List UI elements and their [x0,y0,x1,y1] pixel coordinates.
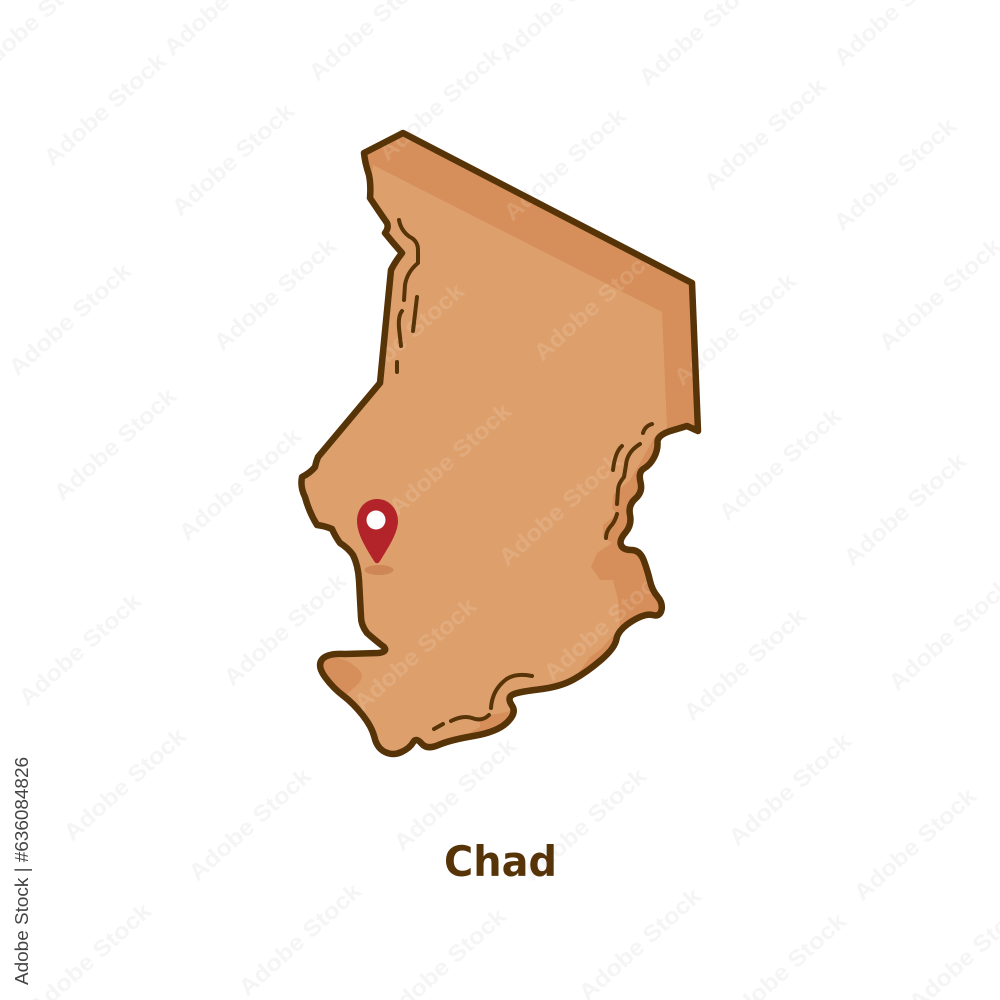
watermark over map: Adobe Stock [383,397,516,521]
watermark over map: Adobe Stock [373,42,506,166]
watermark over map: Adobe Stock [493,447,626,571]
map of Chad [298,130,702,758]
watermark pattern: Adobe Stock [723,727,856,851]
watermark over map: Adobe Stock [668,267,801,391]
watermark pattern: Adobe Stock [373,42,506,166]
watermark pattern: Adobe Stock [218,567,351,691]
watermark over map: Adobe Stock [336,277,469,401]
watermark pattern: Adobe Stock [713,402,846,526]
watermark over map: Adobe Stock [528,242,661,366]
watermark pattern: Adobe Stock [233,877,366,1000]
stock image credit: Adobe Stock | #636084826 [12,757,32,985]
map lighter face [290,165,667,770]
watermark pattern: Adobe Stock [3,257,136,381]
watermark pattern: Adobe Stock [838,447,971,571]
watermark pattern: Adobe Stock [828,112,961,236]
watermark pattern: Adobe Stock [873,232,1000,356]
watermark pattern: Adobe Stock [388,732,521,856]
watermark pattern: Adobe Stock [13,587,146,711]
title: country name: Chad [444,837,557,886]
pin body [357,499,398,563]
watermark pattern: Adobe Stock [848,782,981,906]
pin shadow [364,565,394,575]
watermark over map: Adobe Stock [218,567,351,691]
watermark pattern: Adobe Stock [498,102,631,226]
watermark pattern: Adobe Stock [173,422,306,546]
icon: location pin [357,499,398,575]
watermark pattern: Adobe Stock [698,72,831,196]
watermark pattern: Adobe Stock [678,602,811,726]
watermark over map: Adobe Stock [498,102,631,226]
watermark pattern: Adobe Stock [48,382,181,506]
map outline [301,133,698,754]
watermark over map: Adobe Stock [388,732,521,856]
watermark pattern: Adobe Stock [58,722,191,846]
watermark pattern: Adobe Stock [183,762,316,886]
watermark pattern: Adobe Stock [208,232,341,356]
map base fill [301,133,698,754]
terrain detail lines [397,220,652,729]
watermark over map: Adobe Stock [538,562,671,686]
watermark over map: Adobe Stock [348,592,481,716]
watermark pattern: Adobe Stock [38,47,171,171]
watermark pattern: Adobe Stock [518,762,651,886]
pin hole [366,510,386,530]
watermark pattern: Adobe Stock [668,267,801,391]
watermark pattern: Adobe Stock [166,97,299,221]
watermark over map [357,137,692,711]
